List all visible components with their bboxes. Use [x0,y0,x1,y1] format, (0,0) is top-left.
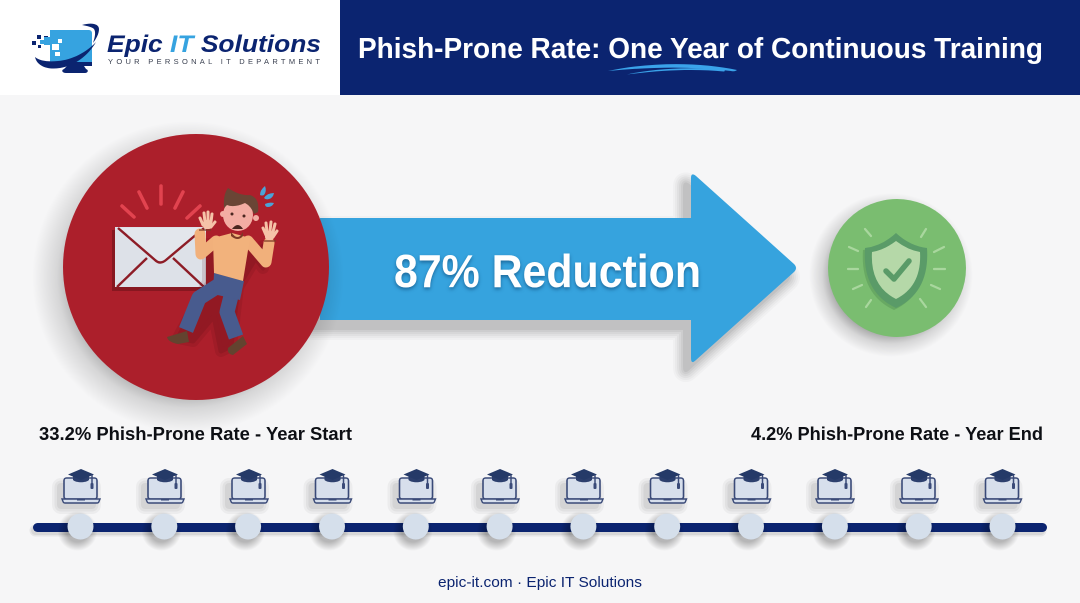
icon: monitor logo [32,24,99,73]
arms [200,234,269,262]
hands [200,212,277,240]
collar and head [231,232,243,239]
footer: epic-it.com · Epic IT Solutions [438,575,642,591]
title underline swoosh [608,64,737,74]
timeline nodes [68,514,1016,540]
shoes [167,331,189,344]
label: year end rate: 4.2% Phish-Prone Rate - Year End [751,423,1043,444]
shadow [178,244,263,351]
header: title panel [340,0,1080,95]
logo wordmark: Epic IT Solutions [107,31,321,58]
legs [186,282,236,337]
panel: red circle, phished user [32,121,344,433]
arrow: 87% reduction [313,174,796,371]
icon: shield with check [863,233,927,310]
title: Phish-Prone Rate: One Year of Continuous Training [358,33,1043,65]
torso [213,233,250,281]
hair [224,188,258,214]
icon: sweat drops [260,186,274,207]
icon: alert rays [122,186,200,218]
header: logo panel [0,0,340,95]
wrist bands [199,230,276,241]
icon: envelope [112,227,206,291]
timeline: twelve months of training [31,469,1047,551]
icon: radiating lines [848,229,945,307]
icon: frightened man [167,188,277,355]
arrow label: 87% Reduction [394,245,701,297]
panel: green circle, shield [809,193,973,357]
face [230,212,246,229]
icons: graduation cap laptops [58,469,1022,508]
label: year start rate: 33.2% Phish-Prone Rate - Year Start [39,423,352,444]
timeline node shadows [58,511,1020,551]
logo tagline: YOUR PERSONAL IT DEPARTMENT [108,57,320,66]
